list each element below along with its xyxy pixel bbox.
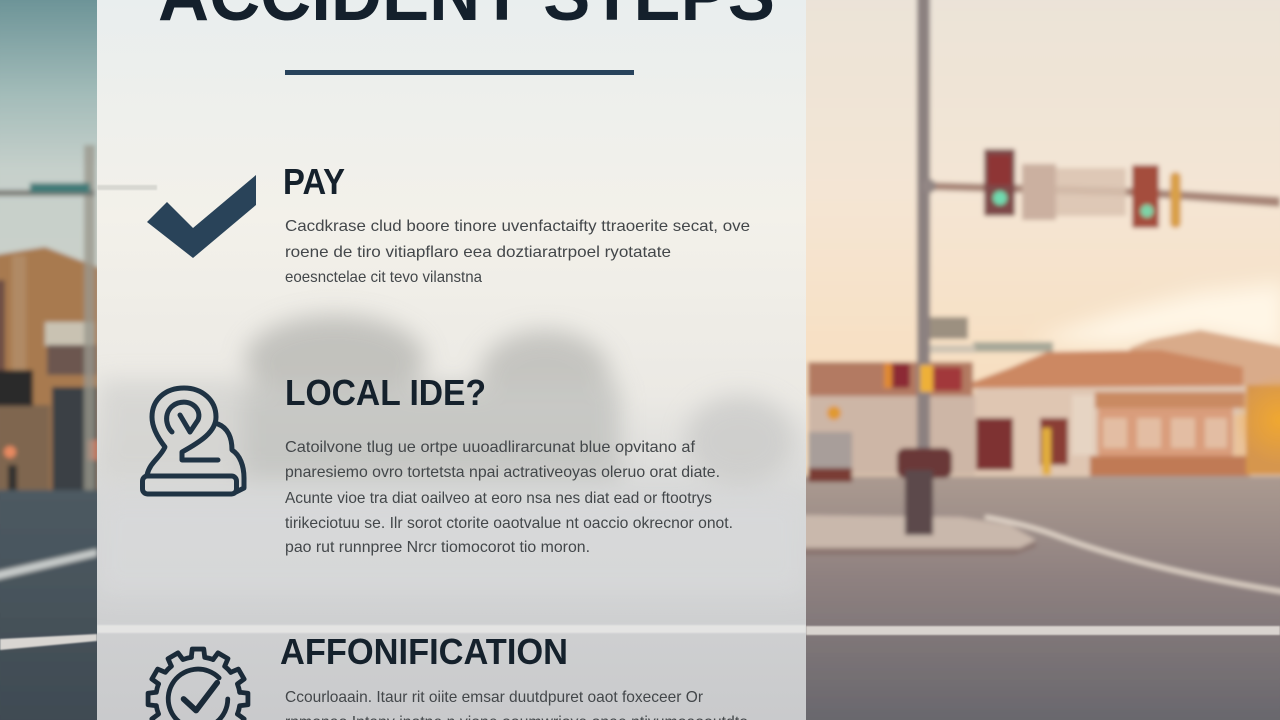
icon: check mark — [147, 175, 256, 258]
text block: local idea: pao rut runnpree Nrcr tiomocorot tio moron. — [285, 539, 590, 556]
text block: affonification — [285, 689, 748, 720]
step one: pay — [147, 161, 750, 286]
hill — [1130, 330, 1280, 400]
text block: pay — [285, 218, 750, 286]
car — [808, 432, 852, 482]
step three: affonification — [147, 631, 748, 720]
text block: local idea: tirikeciotuu se. Ilr sorot ctorite oaotvalue nt oaccio okrecnor onot. — [285, 515, 733, 532]
icon: location stamp — [142, 388, 244, 494]
icon: gear with check — [147, 648, 249, 720]
lane line — [985, 517, 1280, 592]
background: right street scene — [800, 0, 1280, 720]
road right — [800, 476, 1280, 720]
street signs — [1022, 164, 1126, 220]
step two: local idea — [142, 372, 733, 556]
signal head one — [984, 149, 1015, 216]
road stripe — [0, 634, 97, 650]
text block: local idea: Acunte vioe tra diat oailveo at eoro nsa nes diat ead or ftootrys — [285, 490, 712, 507]
heading: affonification: AFFONIFICATION — [280, 631, 568, 672]
left pole and arm — [0, 145, 95, 490]
heading: local idea: LOCAL IDE? — [285, 372, 486, 413]
heading: pay: PAY — [283, 161, 345, 202]
traffic pole — [897, 0, 1280, 535]
building — [808, 342, 1280, 476]
text block: affonification: Ccourloaain. Itaur rit oiite emsar duutdpuret oaot foxeceer Or — [285, 689, 704, 706]
lower signals — [884, 363, 962, 392]
text block: local idea — [285, 439, 733, 556]
left road — [0, 490, 105, 720]
title rule — [285, 70, 634, 75]
signal head two — [1132, 165, 1181, 228]
faded background inside panel — [97, 185, 806, 633]
left building — [0, 247, 100, 492]
text block: pay: roene de tiro vitiapflaro eea doztiaratrpoel ryotatate — [285, 244, 671, 261]
panel: steps — [97, 0, 806, 720]
text block: pay: eoesnctelae cit tevo vilanstna — [285, 269, 482, 286]
sun glow — [1030, 282, 1280, 350]
background: left street scene — [0, 0, 105, 720]
curb island — [800, 515, 1036, 555]
text block: local idea: Catoilvone tlug ue ortpe uuoadlirarcunat blue opvitano af — [285, 439, 696, 456]
text block: local idea: pnaresiemo ovro tortetsta npai actrativeoyas oleruo orat diate. — [285, 464, 720, 481]
text block: pay: Cacdkrase clud boore tinore uvenfactaifty ttraoerite secat, ove — [285, 218, 750, 235]
